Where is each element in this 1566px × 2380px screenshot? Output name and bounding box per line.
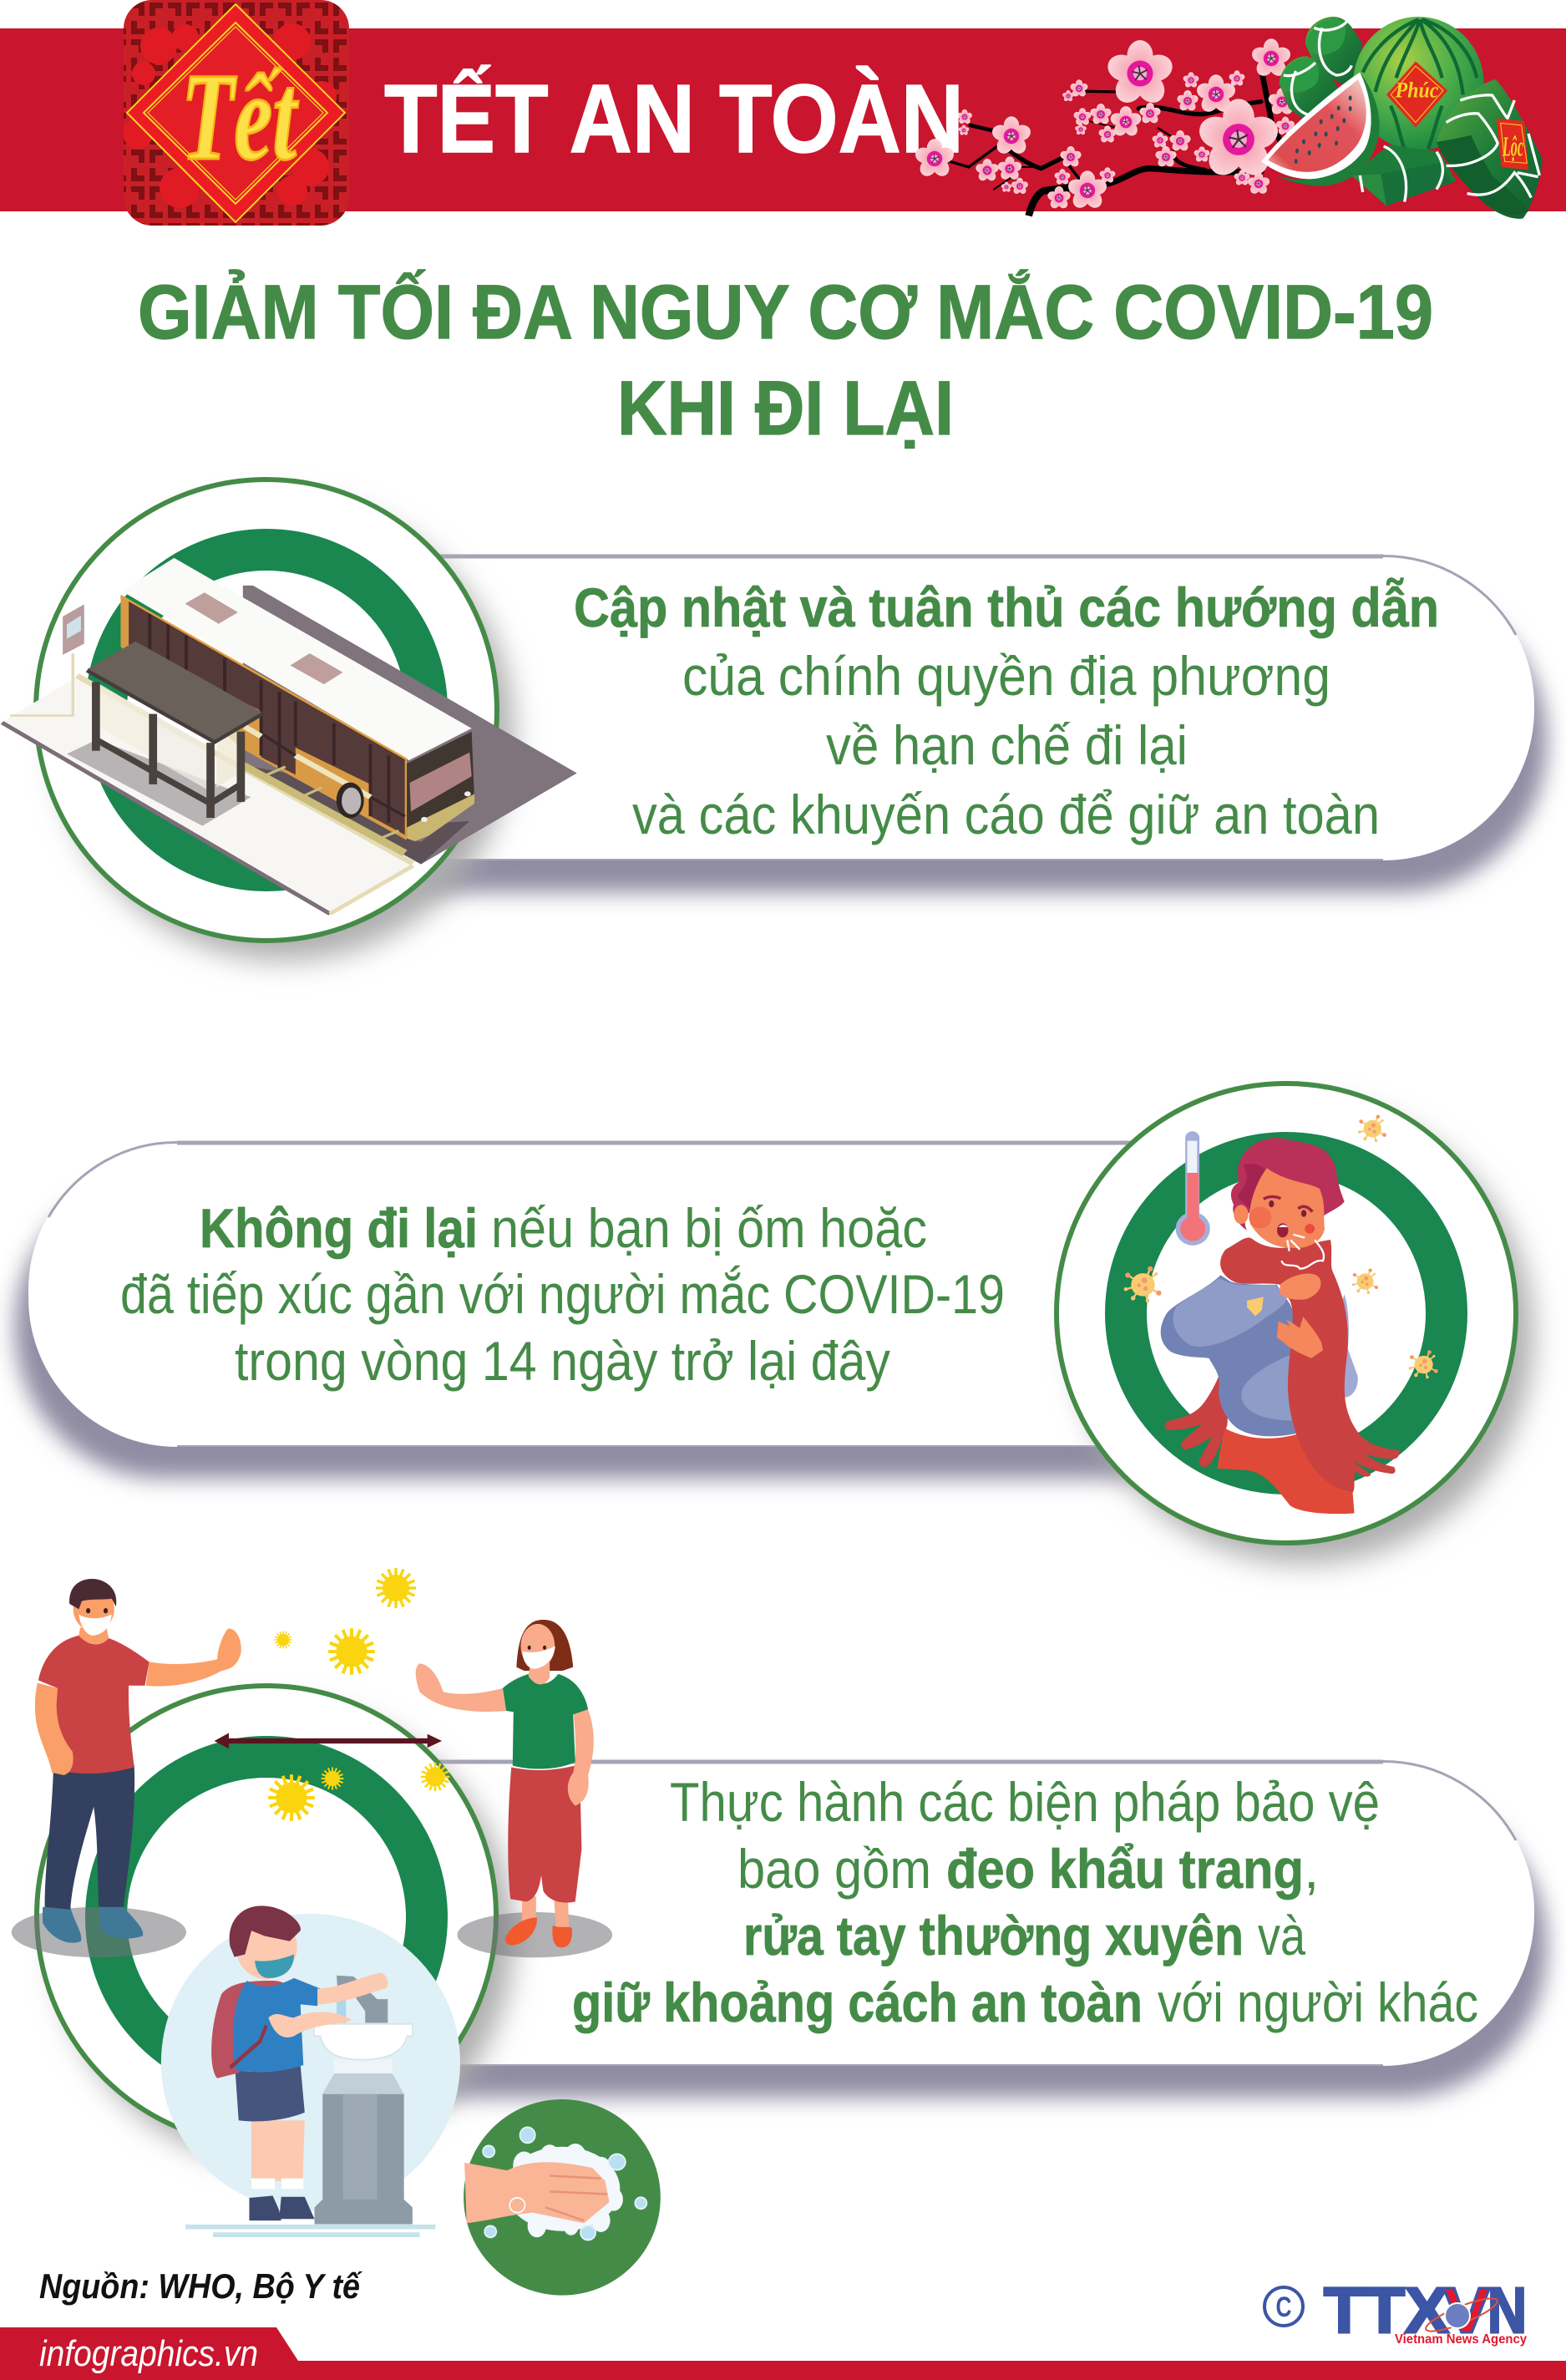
- woman with mask: [416, 1620, 612, 1957]
- whole watermelon: [1353, 17, 1484, 150]
- TTXVN logo: V: [1443, 2275, 1490, 2347]
- panel text: với người khác: [1158, 1971, 1478, 2033]
- banner title: TẾT AN TOÀN: [384, 64, 964, 173]
- green ring badge: [36, 480, 497, 941]
- green ring badge: [37, 1686, 496, 2145]
- pill shadow: [276, 1795, 1547, 2098]
- panel text: [572, 1771, 1478, 2033]
- footer site name: infographics.vn: [39, 2333, 258, 2374]
- panel text: Không đi lại: [200, 1197, 478, 1259]
- man with mask: [12, 1579, 241, 1957]
- circle shadow: [56, 1708, 514, 2166]
- copyright mark: [1264, 2287, 1303, 2326]
- TTXVN logo: N: [1487, 2275, 1527, 2347]
- pill shadow: [276, 590, 1547, 892]
- footer red bar: [0, 2327, 1566, 2380]
- banh chung top: [1280, 17, 1363, 123]
- panel: update and follow guidance: [2, 480, 1547, 961]
- TTXVN logo: Vietnam News Agency: [1395, 2332, 1527, 2347]
- circle shadow: [1076, 1106, 1533, 1564]
- panel: do not travel if sick: [15, 1083, 1533, 1564]
- illustration: people keeping distance and child washing hands: [12, 1579, 612, 2235]
- text pill: [28, 1141, 1281, 1447]
- illustration: bus at shelter: [2, 558, 577, 914]
- panel text: rửa tay thường xuyên: [743, 1905, 1244, 1966]
- panel text: bao gồm: [737, 1838, 931, 1900]
- main heading: GIẢM TỐI ĐA NGUY CƠ MẮC COVID-19: [138, 269, 1433, 355]
- illustration: peach blossom branch: [914, 38, 1297, 216]
- green ring badge: [1057, 1083, 1516, 1543]
- illustration: sick person with fever and virus: [1124, 1114, 1438, 1514]
- panel text: và: [1258, 1905, 1305, 1966]
- icon: soapy hands circle: [464, 2099, 661, 2296]
- main heading: [138, 269, 1433, 451]
- banh chung right: [1437, 79, 1543, 219]
- top red banner: [0, 28, 1566, 211]
- thermometer: [1176, 1131, 1210, 1246]
- panel: protective measures: [12, 1568, 1547, 2296]
- child washing hands: [161, 1906, 460, 2235]
- icon: Tết logo tile: [123, 0, 349, 226]
- panel text: của chính quyền địa phương: [682, 645, 1330, 707]
- branches: [948, 75, 1284, 216]
- banh chung bottom: [1351, 145, 1456, 206]
- banh chung right: Lộc: [1502, 132, 1523, 163]
- panel text: [120, 1197, 1005, 1392]
- pill shadow: [15, 1176, 1268, 1479]
- main heading: KHI ĐI LẠI: [617, 366, 954, 451]
- panel text: trong vòng 14 ngày trở lại đây: [235, 1330, 890, 1392]
- illustration: Tet fruits and banh chung: [1261, 17, 1543, 219]
- blossoms: [1104, 40, 1176, 108]
- panel text: và các khuyến cáo để giữ an toàn: [632, 784, 1380, 845]
- watermelon slice: [1261, 73, 1380, 186]
- TTXVN logo: TTX: [1324, 2275, 1449, 2347]
- globe: [1423, 2292, 1500, 2337]
- whole watermelon: Phúc: [1395, 79, 1439, 103]
- panel text: giữ khoảng cách an toàn: [572, 1971, 1143, 2033]
- panel text: [574, 576, 1439, 845]
- text pill: [266, 1760, 1534, 2066]
- panel text: đeo khẩu trang: [946, 1838, 1304, 1900]
- TTXVN logo: [1324, 2275, 1527, 2347]
- copyright mark: C: [1276, 2291, 1291, 2323]
- virus icons: [268, 1568, 449, 1821]
- panel text: về hạn chế đi lại: [826, 714, 1188, 776]
- panel text: Cập nhật và tuân thủ các hướng dẫn: [574, 576, 1439, 638]
- blossoms behind title: [956, 109, 973, 136]
- text pill: [266, 555, 1534, 860]
- logo word: Tết: [181, 48, 299, 186]
- panel text: ,: [1304, 1838, 1319, 1900]
- panel text: đã tiếp xúc gần với người mắc COVID-19: [120, 1263, 1005, 1325]
- cough cloud: [1282, 1235, 1324, 1269]
- panel text: nếu bạn bị ốm hoặc: [491, 1197, 927, 1259]
- distance arrow: [215, 1733, 442, 1748]
- circle shadow: [56, 503, 514, 961]
- head: [1231, 1138, 1345, 1248]
- source note: Nguồn: WHO, Bộ Y tế: [39, 2266, 362, 2306]
- panel text: Thực hành các biện pháp bảo vệ: [670, 1771, 1380, 1833]
